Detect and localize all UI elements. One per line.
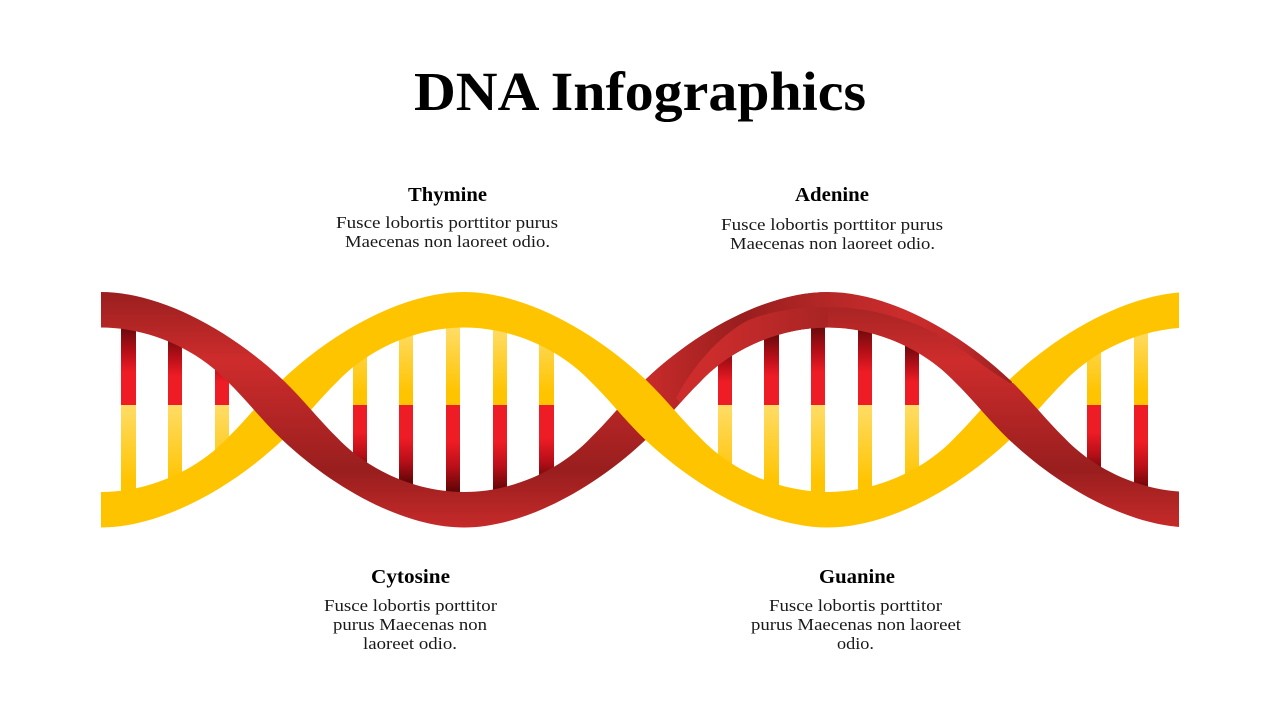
title: DNA Infographics (414, 61, 866, 122)
red strand: last descending section (826, 285, 1195, 530)
heading: Cytosine: Cytosine (371, 566, 450, 588)
body: Cytosine: Fusce lobortis porttitor (324, 596, 497, 615)
text block: Cytosine (324, 566, 497, 653)
body: Cytosine: laoreet odio. (363, 634, 457, 653)
rungs: right group, yellow over red (1087, 325, 1148, 493)
body: Guanine: purus Maecenas non laoreet (751, 615, 961, 634)
text block: Guanine (751, 566, 961, 653)
body: Cytosine: purus Maecenas non (333, 615, 488, 634)
body: Guanine (751, 596, 961, 653)
base pair rungs (121, 322, 1148, 497)
rungs: centre-left group, yellow over red (353, 322, 554, 497)
body: Cytosine (324, 596, 497, 653)
rungs: centre-right group, red over yellow (718, 322, 919, 497)
body: Thymine: Fusce lobortis porttitor purus (336, 213, 558, 232)
yellow strand (101, 292, 1191, 528)
body: Thymine (336, 213, 558, 251)
red strand: first descending section (101, 292, 464, 528)
heading: Adenine: Adenine (795, 184, 869, 206)
text block: Thymine (336, 184, 558, 251)
text block: Adenine (721, 184, 943, 253)
body: Guanine: Fusce lobortis porttitor (769, 596, 942, 615)
body: Adenine: Fusce lobortis porttitor purus (721, 215, 943, 234)
body: Guanine: odio. (837, 634, 874, 653)
body: Adenine: Maecenas non laoreet odio. (730, 234, 935, 253)
body: Thymine: Maecenas non laoreet odio. (345, 232, 550, 251)
body: Adenine (721, 215, 943, 253)
heading: Guanine: Guanine (819, 566, 895, 588)
DNA helix (101, 285, 1195, 530)
red strand: rising section (464, 285, 830, 528)
heading: Thymine: Thymine (408, 184, 487, 206)
rungs: left group, red over yellow (121, 322, 229, 497)
